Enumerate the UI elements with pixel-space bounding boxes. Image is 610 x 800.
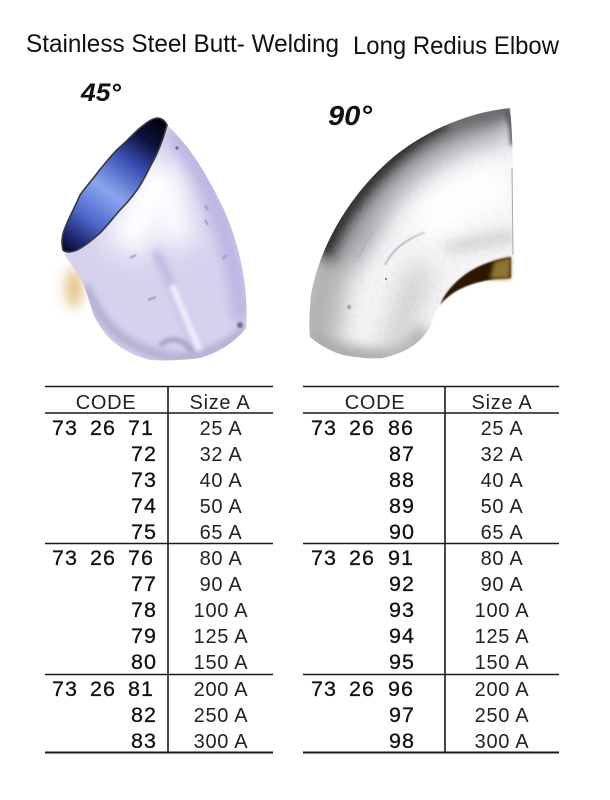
- code column: 77: [131, 572, 157, 596]
- size column: 25 A: [200, 418, 242, 440]
- code column: 90: [389, 520, 415, 544]
- code column: [52, 416, 157, 753]
- size column: 150 A: [475, 652, 529, 674]
- size column: [475, 418, 529, 753]
- table rules: [45, 386, 273, 752]
- size column: 65 A: [481, 522, 523, 544]
- code column: 91: [388, 546, 414, 570]
- code column: 26: [90, 546, 116, 570]
- code column: 73: [311, 416, 337, 440]
- size column: 125 A: [475, 626, 529, 648]
- code column: 81: [128, 677, 154, 701]
- code column: 73: [311, 546, 337, 570]
- code column: 88: [389, 468, 415, 492]
- code column: 79: [131, 624, 157, 648]
- code column: [311, 416, 415, 753]
- column header: size: Size A: [472, 392, 532, 414]
- title: long radius elbow: Long Redius Elbow: [353, 32, 560, 60]
- size column: 150 A: [194, 652, 248, 674]
- size column: 90 A: [200, 574, 242, 596]
- size column: 80 A: [200, 548, 242, 570]
- code column: 94: [389, 624, 415, 648]
- code column: 82: [131, 703, 157, 727]
- photo: 45 degree elbow: [62, 118, 247, 360]
- column header: size: Size A: [190, 392, 250, 414]
- code column: 78: [131, 598, 157, 622]
- code column: 92: [389, 572, 415, 596]
- size column: 40 A: [200, 470, 242, 492]
- code column: 98: [389, 729, 415, 753]
- size column: 50 A: [481, 496, 523, 518]
- code column: 96: [388, 677, 414, 701]
- code column: 74: [131, 494, 157, 518]
- code column: 80: [131, 650, 157, 674]
- code column: 97: [389, 703, 415, 727]
- size column: 200 A: [475, 679, 529, 701]
- size column: 90 A: [481, 574, 523, 596]
- code column: 83: [131, 729, 157, 753]
- size column: 125 A: [194, 626, 248, 648]
- size column: 200 A: [194, 679, 248, 701]
- code column: 73: [52, 677, 78, 701]
- size column: 50 A: [200, 496, 242, 518]
- code column: 95: [389, 650, 415, 674]
- code column: 89: [389, 494, 415, 518]
- code column: 26: [90, 416, 116, 440]
- size column: 32 A: [481, 444, 523, 466]
- column header: code: CODE: [76, 392, 136, 414]
- size column: [194, 418, 248, 753]
- code column: 87: [389, 442, 415, 466]
- code column: 73: [131, 468, 157, 492]
- code column: 73: [311, 677, 337, 701]
- column header: code: CODE: [345, 392, 405, 414]
- size column: 100 A: [194, 600, 248, 622]
- size column: 40 A: [481, 470, 523, 492]
- code column: 26: [349, 416, 375, 440]
- title: stainless steel butt-welding: Stainless Steel Butt- Welding: [26, 30, 339, 58]
- size column: 25 A: [481, 418, 523, 440]
- size column: 80 A: [481, 548, 523, 570]
- table rules: [303, 386, 559, 752]
- code column: 76: [128, 546, 154, 570]
- code column: 71: [128, 416, 154, 440]
- code column: 73: [52, 546, 78, 570]
- code column: 73: [52, 416, 78, 440]
- table: 90 degree elbow codes: [303, 386, 559, 753]
- code column: 26: [90, 677, 116, 701]
- table: 45 degree elbow codes: [45, 386, 273, 753]
- code column: 26: [349, 546, 375, 570]
- label: 45 degrees: 45°: [80, 79, 122, 107]
- code column: 72: [131, 442, 157, 466]
- size column: 250 A: [194, 705, 248, 727]
- code column: 26: [349, 677, 375, 701]
- label: 90 degrees: 90°: [328, 100, 373, 131]
- size column: 250 A: [475, 705, 529, 727]
- code column: 86: [388, 416, 414, 440]
- size column: 65 A: [200, 522, 242, 544]
- photo: 90 degree elbow: [309, 108, 514, 358]
- size column: 300 A: [475, 731, 529, 753]
- size column: 300 A: [194, 731, 248, 753]
- code column: 75: [131, 520, 157, 544]
- code column: 93: [389, 598, 415, 622]
- size column: 100 A: [475, 600, 529, 622]
- size column: 32 A: [200, 444, 242, 466]
